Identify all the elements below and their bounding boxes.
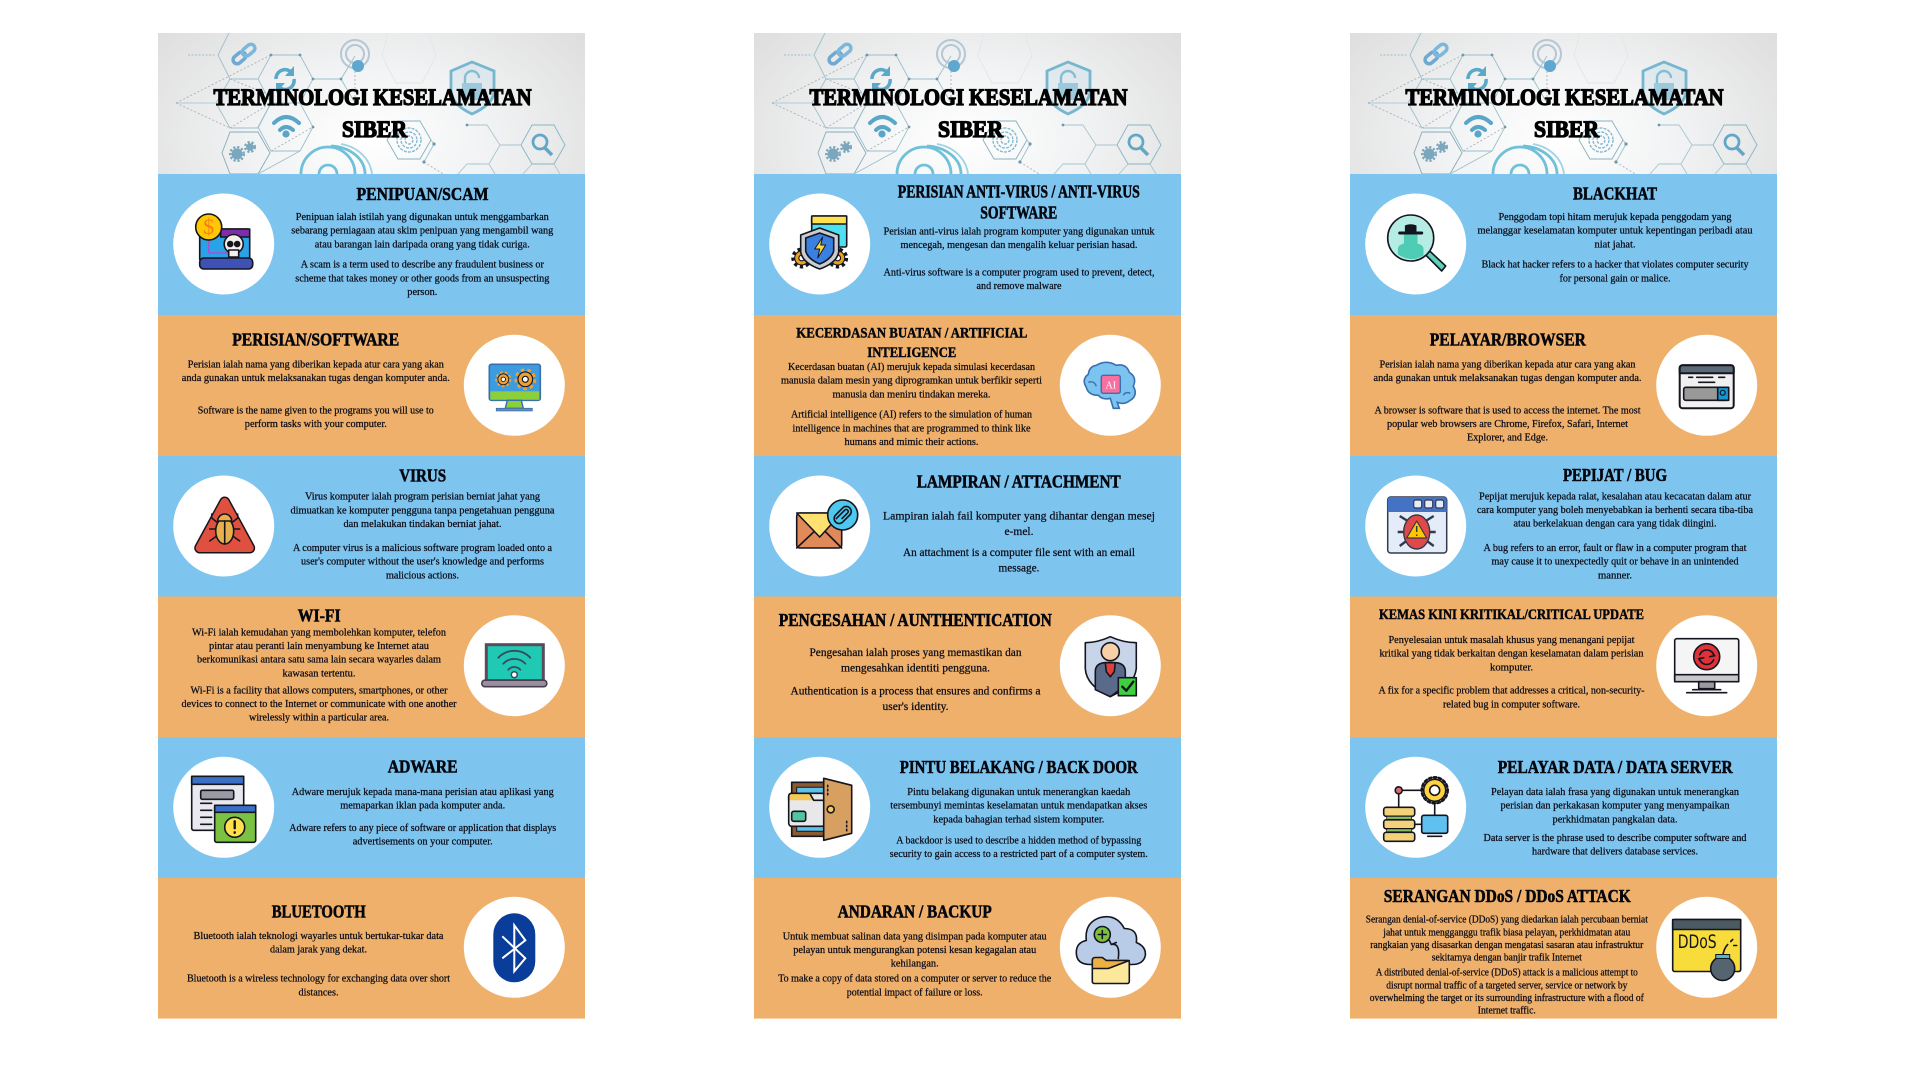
description text: niat jahat. (1594, 238, 1636, 250)
panel: Pintu Belakang (754, 738, 1181, 878)
description text: manusia dalam mesin yang diprogramkan untuk berfikir seperti (781, 375, 1042, 387)
icon background circle (173, 757, 274, 858)
description text: Perisian ialah nama yang diberikan kepada atur cara yang akan (1380, 358, 1636, 370)
description text (290, 491, 555, 581)
panel: Wi-Fi (158, 596, 585, 738)
description text (790, 645, 1041, 713)
description text: pelayan untuk mengurangkan potensi kesan kegagalan atau (793, 944, 1037, 956)
panel: Andaran (754, 878, 1181, 1019)
panel: Kemas Kini Kritikal (1350, 596, 1777, 738)
title (810, 85, 1128, 142)
description text: pintar atau peranti lain menyambung ke Internet atau (209, 640, 429, 652)
description text: jahat untuk mengganggu trafik biasa pelayan, perkhidmatan atau (1382, 927, 1631, 938)
description text: mencegah, mengesan dan mengalih keluar perisian hasad. (900, 239, 1138, 251)
heading: PENGESAHAN / AUNTHENTICATION (779, 610, 1052, 630)
description text: Untuk membuat salinan data yang disimpan pada komputer atau (783, 930, 1047, 942)
icon: adware windows (192, 776, 256, 842)
icon: scam laptop (196, 214, 253, 269)
description text (890, 786, 1148, 860)
icon: scam laptop: $ (203, 214, 214, 239)
heading: WI-FI (298, 606, 341, 626)
icon background circle (464, 615, 565, 716)
description text: dalam jarak yang dekat. (270, 944, 367, 956)
description text (1477, 490, 1753, 581)
description text: kepada bahagian terhad sistem komputer. (933, 813, 1105, 825)
description text: user's computer without the user's knowledge and performs (301, 556, 544, 568)
icon: authentication shield (1085, 637, 1136, 697)
description text: may cause it to unexpectedly quit or behave in an unintended (1492, 556, 1739, 568)
description text: An attachment is a computer file sent with an email (903, 545, 1136, 559)
heading: KEMAS KINI KRITIKAL/CRITICAL UPDATE (1379, 607, 1644, 623)
description text: Software is the name given to the programs you will use to (198, 404, 434, 416)
description text: related bug in computer software. (1443, 698, 1580, 710)
icon: cloud backup (1076, 917, 1145, 984)
description text: Kecerdasan buatan (AI) merujuk kepada simulasi kecerdasan (788, 361, 1035, 373)
description text: perform tasks with your computer. (245, 418, 387, 430)
description text: sebarang perniagaan atau skim penipuan yang mengambil wang (291, 225, 554, 237)
description text: intelligence in machines that are programmed to think like (792, 422, 1031, 434)
icon: bluetooth (493, 913, 535, 982)
description text: overwhelming the target or its surrounding infrastructure with a flood of (1370, 993, 1644, 1004)
heading: KECERDASAN BUATAN / ARTIFICIAL (796, 325, 1028, 341)
description text: anda gunakan untuk melaksanakan tugas dengan komputer anda. (182, 372, 450, 384)
description text: scheme that takes money or other goods from an unsuspecting (295, 272, 550, 284)
heading: INTELIGENCE (867, 345, 956, 361)
title: TERMINOLOGI KESELAMATAN (1406, 85, 1724, 110)
description text: hardware that delivers database services. (1532, 846, 1698, 858)
description text: person. (407, 286, 438, 298)
icon: browser window (1680, 365, 1734, 408)
panel: column 1 (158, 29, 585, 1019)
description text: e-mel. (1004, 524, 1034, 538)
description text: Perisian ialah nama yang diberikan kepada atur cara yang akan (188, 358, 444, 370)
panel: Bluetooth (158, 878, 585, 1019)
title: TERMINOLOGI KESELAMATAN (214, 85, 532, 110)
panel: Blackhat (1350, 174, 1777, 315)
panel: Perisian/Software (158, 315, 585, 456)
icon: DDoS window with bomb: DDoS (1678, 931, 1717, 953)
panel: Serangan DDoS (1350, 878, 1777, 1019)
description text: Pintu belakang digunakan untuk menerangkan kaedah (907, 786, 1131, 798)
description text: security to gain access to a restricted part of a computer system. (890, 848, 1148, 860)
description text (1366, 915, 1648, 1016)
description text: distances. (298, 986, 339, 998)
description text: manner. (1598, 569, 1632, 581)
icon background circle (1365, 476, 1466, 576)
icon background circle (769, 194, 870, 294)
panel: Pepijat/Bug (1350, 456, 1777, 596)
icon background circle (1656, 897, 1757, 998)
description text (1378, 634, 1645, 710)
heading (796, 325, 1028, 361)
panel: column 2 (754, 29, 1181, 1019)
description text: atau barangan lain daripada orang yang tidak curiga. (315, 238, 530, 250)
icon: AI brain: AI (1106, 380, 1116, 391)
description text (182, 626, 457, 724)
header image: cyber security network (1350, 29, 1777, 174)
title (214, 85, 532, 142)
description text: A bug refers to an error, fault or flaw in a computer program that (1484, 542, 1746, 554)
icon: anti-virus shield (793, 216, 847, 269)
description text (781, 361, 1042, 448)
icon background circle (1060, 897, 1161, 998)
icon background circle (464, 897, 565, 998)
description text: dimuatkan ke komputer pengguna tanpa pengetahuan pengguna (290, 504, 555, 516)
description text: Adware refers to any piece of software or application that displays (289, 822, 556, 834)
description text: Wi-Fi is a facility that allows computers, smartphones, or other (190, 684, 448, 696)
icon: wifi laptop (482, 645, 547, 687)
description text: Penggodam topi hitam merujuk kepada penggodam yang (1498, 211, 1732, 223)
icon background circle (1060, 335, 1161, 436)
panel: column 3 (1350, 29, 1777, 1019)
description text: wirelessly within a particular area. (249, 712, 389, 724)
icon background circle (769, 757, 870, 858)
description text (778, 930, 1051, 998)
heading: PINTU BELAKANG / BACK DOOR (900, 757, 1138, 777)
description text: rangkaian yang disasarkan dengan mengatasi sasaran atau infrastruktur (1370, 940, 1644, 951)
heading: BLUETOOTH (272, 901, 366, 921)
description text: popular web browsers are Chrome, Firefox, Safari, Internet (1387, 418, 1628, 430)
heading: PELAYAR/BROWSER (1430, 330, 1586, 350)
description text: kawasan tertentu. (282, 667, 356, 679)
description text: dan melakukan tindakan berniat jahat. (344, 518, 502, 530)
icon background circle (1365, 194, 1466, 294)
header image: cyber security network (754, 29, 1181, 174)
description text: Adware merujuk kepada mana-mana perisian atau aplikasi yang (292, 786, 554, 798)
panel: Pelayar Data (1350, 738, 1777, 878)
icon background circle (1060, 615, 1161, 716)
description text (1374, 358, 1642, 444)
heading: ANDARAN / BACKUP (838, 902, 992, 922)
description text: Artificial intelligence (AI) refers to the simulation of human (791, 409, 1032, 421)
panel: Penipuan/Scam (158, 174, 585, 315)
description text: Wi-Fi ialah kemudahan yang membolehkan komputer, telefon (192, 626, 446, 638)
description text: Serangan denial-of-service (DDoS) yang diedarkan ialah percubaan berniat (1366, 915, 1648, 926)
description text (1478, 211, 1753, 284)
description text: devices to connect to the Internet or communicate with one another (182, 698, 457, 710)
description text: Pelayan data ialah frasa yang digunakan untuk menerangkan (1491, 786, 1739, 798)
heading: VIRUS (399, 465, 446, 485)
description text: perkhidmatan pangkalan data. (1552, 813, 1678, 825)
heading: PERISIAN/SOFTWARE (232, 330, 399, 350)
description text: kehilangan. (891, 958, 939, 970)
description text: Virus komputer ialah program perisian berniat jahat yang (305, 491, 540, 503)
description text: atau berkelakuan dengan cara yang tidak diingini. (1514, 518, 1717, 530)
description text: memaparkan iklan pada komputer anda. (340, 800, 505, 812)
panel: Pengesahan (754, 596, 1181, 738)
description text: sekitarnya dengan banjir trafik Internet (1432, 952, 1582, 963)
description text: melanggar keselamatan komputer untuk kepentingan peribadi atau (1478, 225, 1753, 237)
icon background circle (769, 476, 870, 576)
title: SIBER (1534, 117, 1599, 142)
description text: Authentication is a process that ensures and confirms a (790, 683, 1041, 697)
description text: for personal gain or malice. (1560, 272, 1671, 284)
icon: monitor with gears (489, 364, 540, 411)
description text: komputer. (1490, 661, 1533, 673)
icon: data server (1384, 777, 1448, 841)
icon: DDoS window with bomb (1673, 920, 1741, 980)
icon: blackhat magnifier (1388, 215, 1446, 271)
description text (182, 358, 450, 430)
description text: perisian dan perkakasan komputer yang menyampaikan (1500, 800, 1730, 812)
description text: A backdoor is used to describe a hidden method of bypassing (896, 834, 1142, 846)
description text: A fix for a specific problem that addresses a critical, non-security- (1378, 685, 1645, 697)
icon: email attachment (797, 500, 858, 548)
heading: LAMPIRAN / ATTACHMENT (917, 472, 1121, 492)
description text (291, 211, 554, 298)
description text: tersembunyi memintas keselamatan untuk mendapatkan akses (890, 800, 1147, 812)
description text: Internet traffic. (1478, 1005, 1536, 1016)
description text: message. (998, 561, 1040, 575)
description text: disrupt normal traffic of a targeted server, service or network by (1386, 980, 1628, 991)
description text: Explorer, and Edge. (1467, 432, 1548, 444)
description text: kritikal yang tidak berkaitan dengan keselamatan dalam perisian (1380, 648, 1644, 660)
header image: cyber security network (158, 29, 585, 174)
heading: SOFTWARE (980, 202, 1057, 222)
panel: Adware (158, 738, 585, 878)
panel: Virus (158, 456, 585, 596)
description text (883, 508, 1155, 575)
description text: A browser is software that is used to access the internet. The most (1374, 404, 1640, 416)
icon: update monitor (1675, 639, 1739, 693)
description text: A computer virus is a malicious software program loaded onto a (293, 542, 552, 554)
heading: PENIPUAN/SCAM (356, 184, 489, 204)
description text: Pepijat merujuk kepada ralat, kesalahan atau kecacatan dalam atur (1479, 490, 1751, 502)
description text: Penyelesaian untuk masalah khusus yang menangani pepijat (1388, 634, 1634, 646)
description text: To make a copy of data stored on a computer or server to reduce the (778, 973, 1051, 985)
icon: virus warning triangle (200, 502, 250, 548)
icon background circle (464, 335, 565, 436)
icon background circle (1656, 335, 1757, 436)
description text: Anti-virus software is a computer program used to prevent, detect, (884, 266, 1155, 278)
panel: Anti-virus (754, 174, 1181, 315)
description text: Lampiran ialah fail komputer yang dihantar dengan mesej (883, 508, 1155, 522)
panel: Pelayar/Browser (1350, 315, 1777, 456)
description text: Pengesahan ialah proses yang memastikan dan (810, 645, 1022, 659)
title: SIBER (342, 117, 407, 142)
description text (1484, 786, 1747, 858)
panel: Kecerdasan Buatan (754, 315, 1181, 456)
description text (289, 786, 556, 848)
description text: Penipuan ialah istilah yang digunakan untuk menggambarkan (296, 211, 549, 223)
icon: AI brain (1084, 362, 1135, 408)
description text: Data server is the phrase used to describe computer software and (1484, 832, 1747, 844)
icon background circle (1656, 615, 1757, 716)
description text (884, 225, 1155, 292)
description text: Black hat hacker refers to a hacker that violates computer security (1482, 259, 1749, 271)
description text: anda gunakan untuk melaksanakan tugas dengan komputer anda. (1374, 372, 1642, 384)
panel: Lampiran (754, 456, 1181, 596)
description text: advertisements on your computer. (353, 836, 493, 848)
icon: back door (789, 778, 852, 840)
description text: user's identity. (882, 699, 948, 713)
heading: ADWARE (388, 757, 458, 777)
icon background circle (173, 194, 274, 294)
description text: manusia dan meniru tindakan mereka. (832, 388, 991, 400)
description text: Bluetooth is a wireless technology for exchanging data over short (187, 973, 450, 985)
title (1406, 85, 1724, 142)
description text: A distributed denial-of-service (DDoS) attack is a malicious attempt to (1376, 968, 1638, 979)
heading: SERANGAN DDoS / DDoS ATTACK (1384, 886, 1631, 906)
description text: potential impact of failure or loss. (847, 986, 983, 998)
heading: BLACKHAT (1573, 183, 1657, 203)
icon background circle (173, 476, 274, 576)
description text: mengesahkan identiti pengguna. (841, 661, 990, 675)
heading: PEPIJAT / BUG (1563, 465, 1667, 485)
heading: PELAYAR DATA / DATA SERVER (1498, 757, 1733, 777)
description text (187, 930, 450, 998)
description text: Perisian anti-virus ialah program komputer yang digunakan untuk (884, 225, 1155, 237)
icon: bug in window (1388, 497, 1447, 553)
description text: Bluetooth ialah teknologi wayarles untuk bertukar-tukar data (194, 930, 444, 942)
description text: A scam is a term used to describe any fraudulent business or (301, 259, 544, 271)
heading (898, 182, 1140, 222)
description text: cara komputer yang boleh menyebabkan ia berhenti secara tiba-tiba (1477, 504, 1753, 516)
description text: and remove malware (976, 280, 1062, 292)
description text: humans and mimic their actions. (844, 436, 979, 448)
heading: PERISIAN ANTI-VIRUS / ANTI-VIRUS (898, 182, 1140, 202)
description text: berkomunikasi antara satu sama lain secara wayarles dalam (197, 654, 441, 666)
icon background circle (1365, 757, 1466, 858)
description text: malicious actions. (386, 569, 459, 581)
title: SIBER (938, 117, 1003, 142)
title: TERMINOLOGI KESELAMATAN (810, 85, 1128, 110)
